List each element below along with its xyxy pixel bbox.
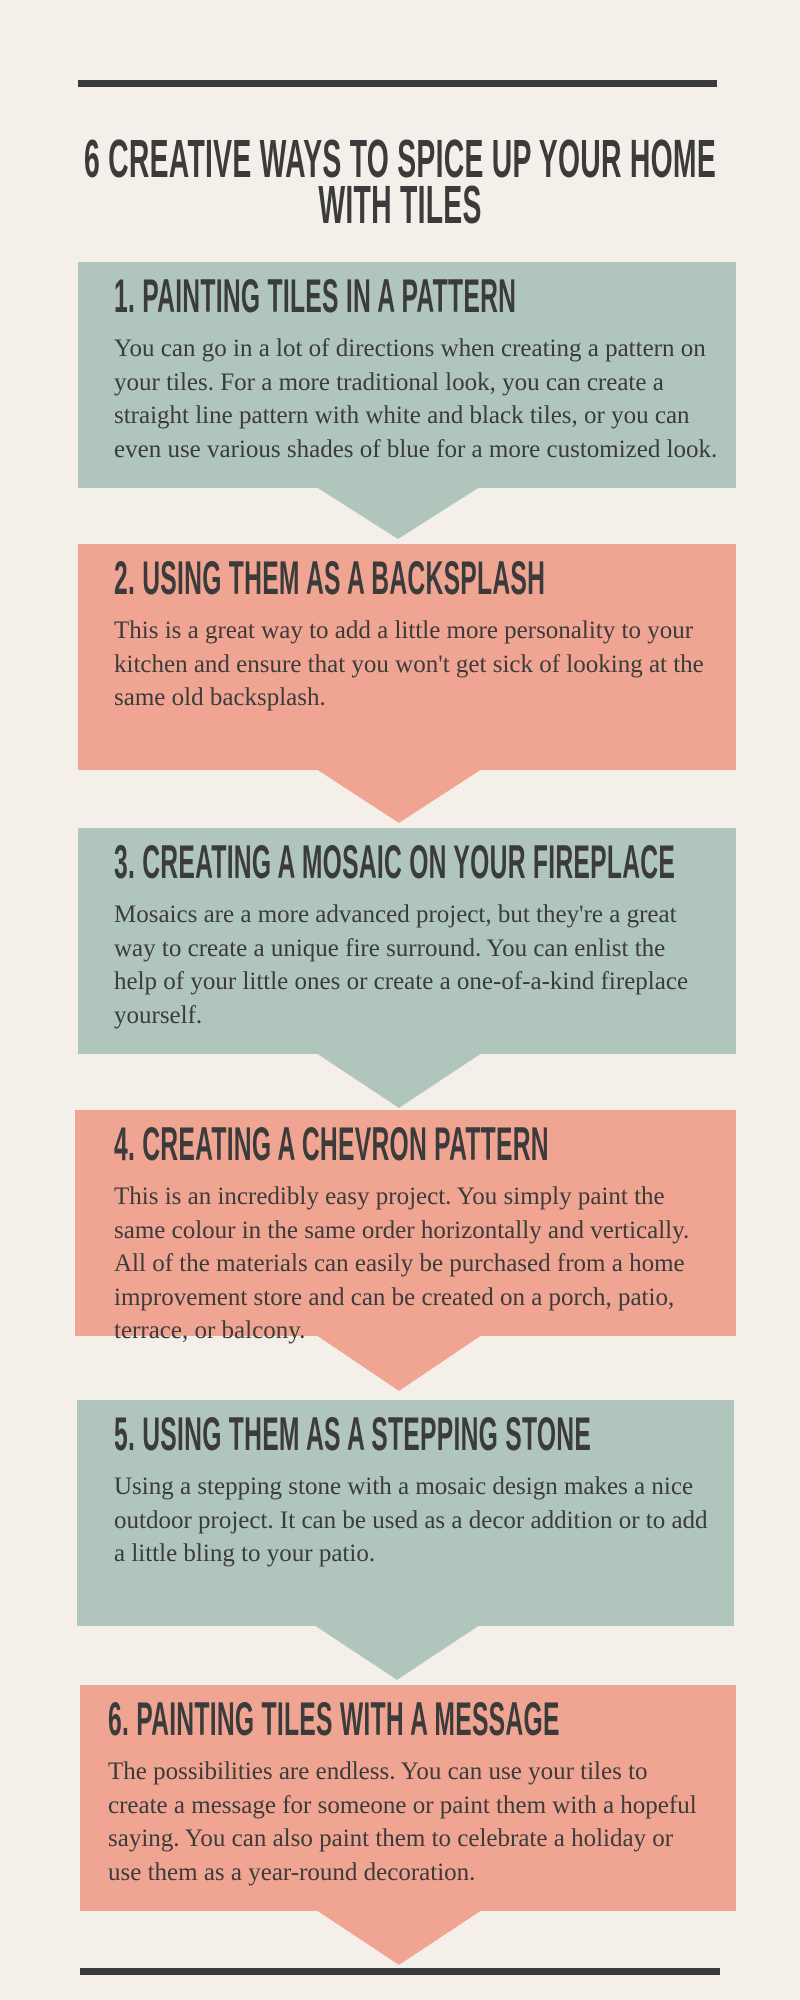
text 1: You can go in a lot of directions when creating a pattern on [114, 335, 706, 362]
text 2: same old backsplash. [114, 684, 326, 711]
panel 2 [78, 544, 736, 770]
text 5 [114, 1473, 708, 1567]
arrow 4 [318, 1336, 480, 1391]
arrow 5 [316, 1626, 478, 1680]
text 3: Mosaics are a more advanced project, but they're a great [114, 901, 677, 928]
text 2 [114, 617, 704, 711]
text 5: outdoor project. It can be used as a decor addition or to add [114, 1506, 708, 1534]
text 6: The possibilities are endless. You can use your tiles to [108, 1758, 648, 1785]
text 1: straight line pattern with white and black tiles, or you can [114, 402, 690, 429]
text 4: This is an incredibly easy project. You simply paint the [114, 1183, 665, 1210]
heading 3: 3. CREATING A MOSAIC ON YOUR FIREPLACE [114, 835, 675, 888]
text 3 [114, 901, 688, 1028]
heading 4: 4. CREATING A CHEVRON PATTERN [114, 1117, 549, 1170]
text 4: terrace, or balcony. [114, 1317, 305, 1344]
text 6: use them as a year-round decoration. [108, 1858, 475, 1886]
text 3: way to create a unique fire surround. You can enlist the [114, 934, 665, 962]
text 1: your tiles. For a more traditional look, you can create a [114, 368, 664, 396]
title: 6 CREATIVE WAYS TO SPICE UP YOUR HOME [84, 129, 716, 189]
text 4 [114, 1183, 689, 1344]
arrow 6 [318, 1911, 480, 1965]
panel 3 [78, 828, 736, 1054]
text 5: Using a stepping stone with a mosaic design makes a nice [114, 1473, 693, 1500]
text 2: This is a great way to add a little more personality to your [114, 617, 693, 644]
panel 4 [75, 1110, 736, 1336]
text 6: create a message for someone or paint them with a hopeful [108, 1792, 697, 1818]
arrow 1 [318, 488, 478, 539]
heading 5: 5. USING THEM AS A STEPPING STONE [114, 1407, 591, 1460]
text 5: a little bling to your patio. [114, 1540, 375, 1567]
text 1: even use various shades of blue for a more customized look. [114, 436, 717, 462]
heading 2: 2. USING THEM AS A BACKSPLASH [114, 551, 545, 604]
text 6: saying. You can also paint them to celebrate a holiday or [108, 1825, 673, 1852]
text 4: same colour in the same order horizontally and vertically. [114, 1216, 689, 1244]
text 3: yourself. [114, 1002, 202, 1028]
panel 5 [77, 1400, 734, 1626]
panel 6 [80, 1685, 736, 1911]
text 4: improvement store and can be created on a porch, patio, [114, 1284, 674, 1310]
text 6 [108, 1758, 697, 1886]
text 4: All of the materials can easily be purchased from a home [114, 1250, 685, 1277]
text 1 [114, 335, 717, 462]
title [84, 129, 716, 235]
arrow 2 [318, 770, 480, 823]
title: WITH TILES [318, 175, 482, 235]
text 3: help of your little ones or create a one-of-a-kind fireplace [114, 968, 688, 995]
arrow 3 [318, 1054, 480, 1108]
heading 1: 1. PAINTING TILES IN A PATTERN [114, 269, 516, 322]
heading 6: 6. PAINTING TILES WITH A MESSAGE [108, 1692, 560, 1745]
text 2: kitchen and ensure that you won't get sick of looking at the [114, 650, 704, 678]
panel 1 [78, 262, 736, 488]
